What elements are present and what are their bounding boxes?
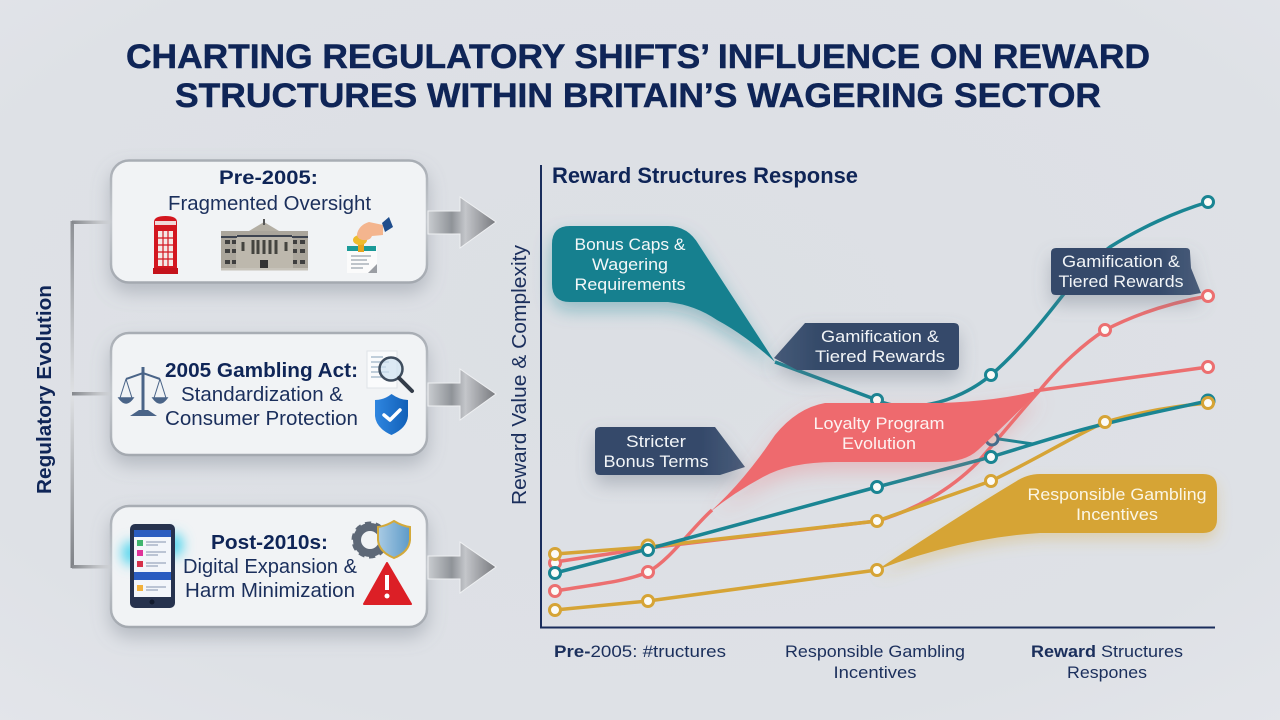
callout: Loyalty Program Evolution <box>710 390 1040 512</box>
callout: Loyalty Program Evolution: Evolution <box>842 434 916 453</box>
icon: warning triangle <box>364 563 411 604</box>
icon: blue shield with check <box>375 394 408 435</box>
line: red lower series <box>555 510 712 591</box>
callout: Bonus Caps and Wagering Requirements: Wagering <box>592 255 668 274</box>
data point nodes <box>550 196 1214 616</box>
y axis label: Reward Value & Complexity <box>509 245 531 505</box>
heading: Pre-2005: Pre-2005: <box>219 168 318 189</box>
title <box>126 38 1150 115</box>
callout: Bonus Caps and Wagering Requirements <box>552 226 775 362</box>
title: CHARTING REGULATORY SHIFTS’ INFLUENCE ON REWARD <box>126 38 1150 76</box>
x axis label: Reward Structures Respones: Reward Structures <box>1031 642 1183 661</box>
callout: Stricter Bonus Terms <box>595 427 745 475</box>
text: Standardization and Consumer Protection: Consumer Protection <box>165 408 358 430</box>
text: Digital Expansion and Harm Minimization: Harm Minimization <box>185 580 355 602</box>
icon: scales of justice <box>119 367 167 416</box>
left axis label: Regulatory Evolution: Regulatory Evolution <box>34 285 56 494</box>
callout: Bonus Caps and Wagering Requirements: Bonus Caps & <box>574 235 686 254</box>
line: teal branch <box>992 438 1033 444</box>
icon: smartphone with app list <box>122 524 183 608</box>
line: teal upper series <box>775 202 1208 406</box>
callout: Gamification and Tiered Rewards (right) <box>1051 248 1201 295</box>
callout: Gamification and Tiered Rewards (right): Tiered Rewards <box>1058 272 1184 291</box>
arrow: Post-2010s to chart <box>428 542 496 593</box>
x axis label: Responsible Gambling Incentives <box>785 642 965 682</box>
text: Standardization and Consumer Protection: Standardization & <box>181 384 344 406</box>
panel: 2005 Gambling Act <box>111 333 427 455</box>
timeline bracket <box>70 220 111 568</box>
chart axes <box>541 165 1215 628</box>
line: red upper series <box>555 296 1208 562</box>
callout: Responsible Gambling Incentives: Incentives <box>1076 505 1158 524</box>
x axis label: Reward Structures Respones <box>1031 642 1183 682</box>
callout: Stricter Bonus Terms: Stricter <box>626 432 686 451</box>
x axis label: Responsible Gambling Incentives: Responsible Gambling <box>785 642 965 661</box>
callout: Stricter Bonus Terms: Bonus Terms <box>604 452 708 471</box>
callout: Gamification and Tiered Rewards (centre): Gamification & <box>821 327 940 346</box>
callout: Responsible Gambling Incentives <box>877 474 1217 570</box>
line: red top branch <box>1034 367 1208 391</box>
line: teal lower series <box>555 401 1208 573</box>
icon: hand, coin and document <box>347 217 393 273</box>
chart heading: Reward Structures Response <box>552 163 858 188</box>
arrow: Pre-2005 to chart <box>428 197 496 248</box>
x axis label: Reward Structures Respones: Respones <box>1067 663 1147 682</box>
panel: Post-2010s <box>111 506 427 627</box>
x axis label: Pre-2005: Pre-2005: #tructures <box>554 642 726 661</box>
panel: Pre-2005 <box>111 160 427 282</box>
callout: Gamification and Tiered Rewards (right): Gamification & <box>1062 252 1181 271</box>
text: Digital Expansion and Harm Minimization <box>183 556 358 602</box>
line: yellow upper series <box>555 403 1208 554</box>
icon: gear with shield <box>354 521 410 558</box>
callout: Gamification and Tiered Rewards (centre) <box>774 323 959 370</box>
icon: document and magnifier <box>367 351 412 391</box>
callout: Gamification and Tiered Rewards (centre): Tiered Rewards <box>815 347 945 366</box>
line: yellow lower series <box>555 570 877 610</box>
arrow: 2005 Act to chart <box>428 369 496 420</box>
nodes behind callouts <box>550 394 1214 568</box>
text: Fragmented Oversight: Fragmented Oversight <box>168 193 371 215</box>
heading: Post-2010s: Post-2010s: <box>211 532 328 554</box>
icon: red phone box <box>153 216 178 274</box>
text: Digital Expansion and Harm Minimization: Digital Expansion & <box>183 556 358 578</box>
x axis label: Responsible Gambling Incentives: Incentives <box>834 663 916 682</box>
text: Standardization and Consumer Protection <box>165 384 358 430</box>
heading: 2005 Gambling Act: 2005 Gambling Act: <box>165 360 358 382</box>
chart: reward structures response <box>509 163 1217 682</box>
callout: Bonus Caps and Wagering Requirements: Requirements <box>574 275 686 294</box>
title: STRUCTURES WITHIN BRITAIN’S WAGERING SECTOR <box>175 77 1101 115</box>
icon: government building <box>221 219 308 270</box>
callout: Loyalty Program Evolution: Loyalty Program <box>814 414 944 433</box>
callout: Responsible Gambling Incentives: Responsible Gambling <box>1028 485 1206 504</box>
